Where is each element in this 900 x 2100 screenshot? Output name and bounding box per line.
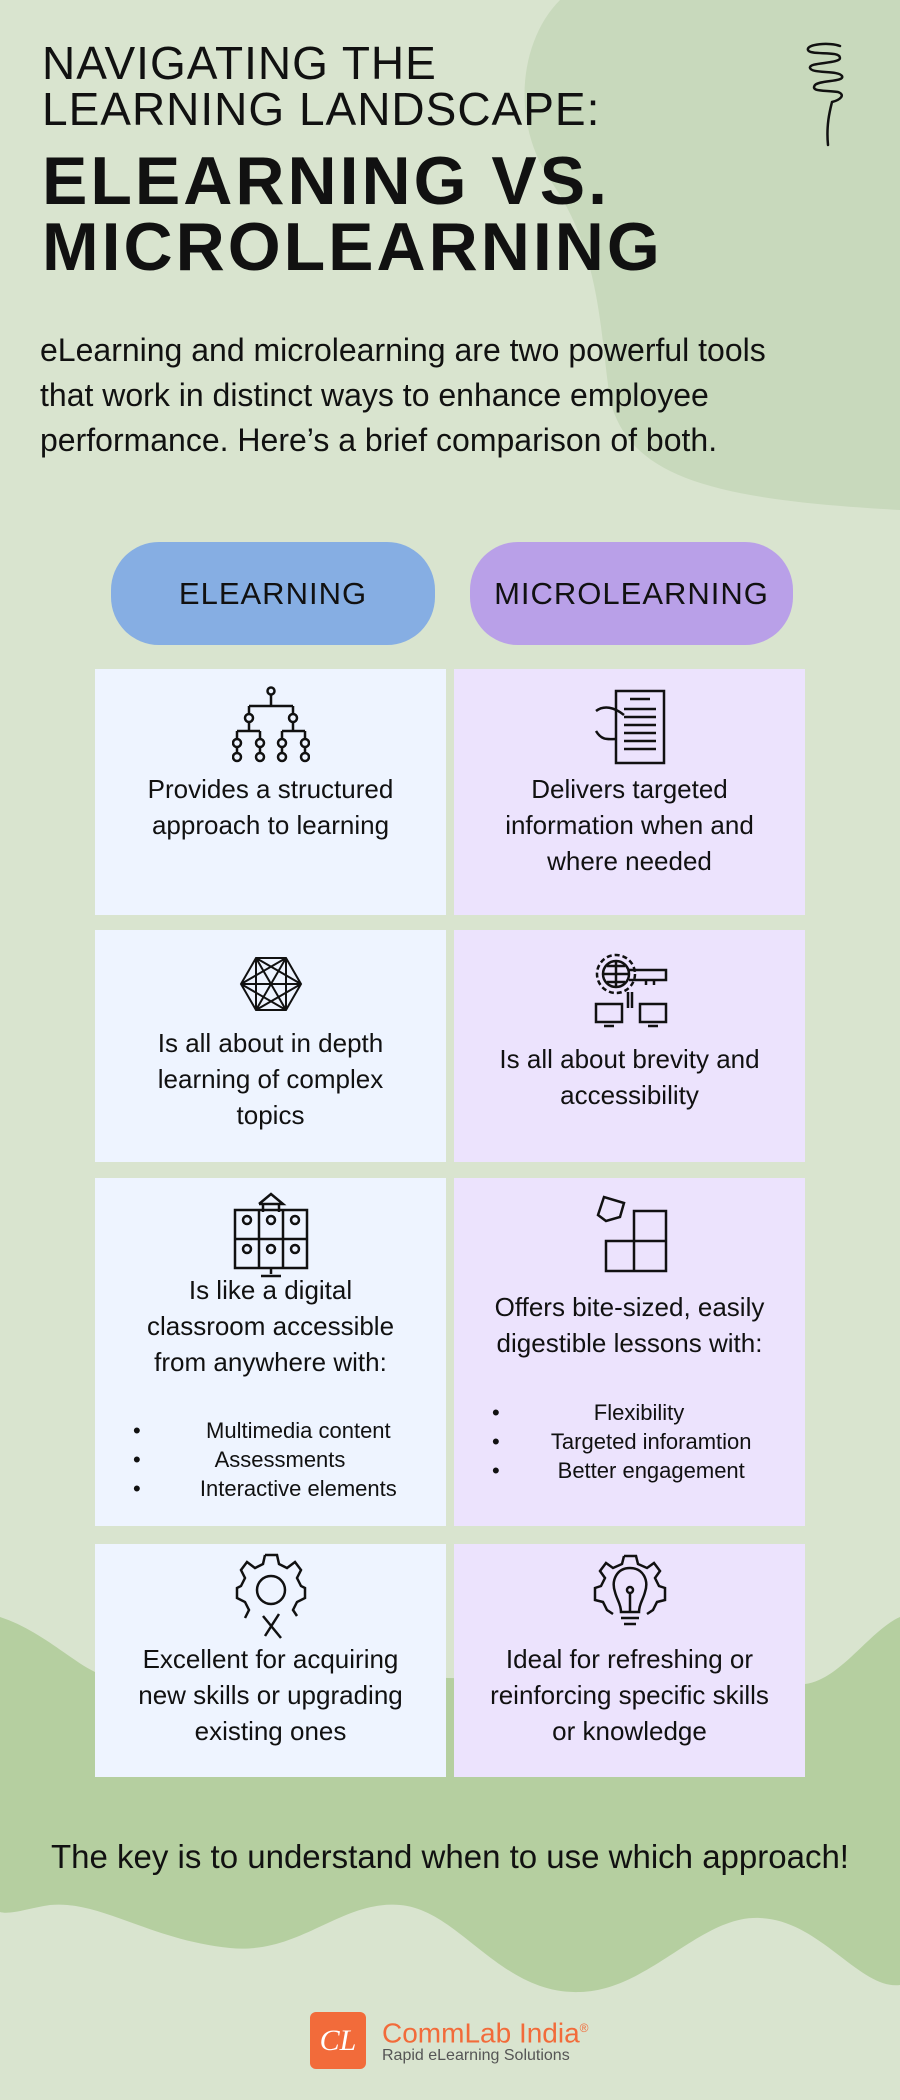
text: in depth: learning of complex [158, 1064, 383, 1094]
card: brevity [454, 930, 805, 1162]
text: in depth: Is all about in depth [158, 1028, 383, 1058]
card: micro targeted [454, 669, 805, 915]
bullet list: elearning: Interactive elements [200, 1476, 397, 1501]
bullet list: microlearning: Better engagement [558, 1458, 745, 1483]
icon: CL logo [310, 2012, 366, 2069]
text: digital classroom [147, 1275, 394, 1377]
icon: CL logo: CL [320, 2024, 356, 2057]
title: NAVIGATING THE [42, 37, 437, 89]
text: targeted: information when and [505, 810, 754, 840]
text: targeted: Delivers targeted [531, 774, 728, 804]
text: bite-sized: digestible lessons with: [497, 1328, 762, 1358]
text: new skills: Excellent for acquiring [143, 1644, 398, 1674]
text: new skills: existing ones [195, 1716, 346, 1746]
icon: gear with tools [236, 1554, 306, 1639]
text: in depth [158, 1028, 383, 1130]
icon: hierarchy [232, 686, 310, 762]
text: structured: approach to learning [152, 810, 389, 840]
title: ELEARNING VS. [42, 143, 610, 219]
logo: CommLab India [310, 2012, 588, 2069]
icon: network [240, 957, 302, 1011]
text: refreshing: or knowledge [552, 1716, 707, 1746]
text: structured: Provides a structured [148, 774, 393, 804]
icon: globe key [594, 954, 668, 1028]
card: elearning structured [95, 669, 446, 915]
text: new skills [138, 1644, 403, 1746]
text: digital classroom: classroom accessible [147, 1311, 394, 1341]
icon: puzzle [596, 1196, 668, 1272]
text: refreshing: Ideal for refreshing or [506, 1644, 753, 1674]
card: bite-sized [454, 1178, 805, 1526]
text: bite-sized [495, 1292, 764, 1358]
text: refreshing [490, 1644, 769, 1746]
intro paragraph: eLearning and microlearning are two powerful tools [40, 332, 766, 368]
intro paragraph: performance. Here’s a brief comparison of both. [40, 422, 717, 458]
bullet list: microlearning [492, 1400, 752, 1483]
text: new skills: new skills or upgrading [138, 1680, 403, 1710]
icon: gear lightbulb [594, 1554, 666, 1626]
pill: microlearning: MICROLEARNING [494, 576, 769, 611]
bullet list: microlearning: Flexibility [594, 1400, 684, 1425]
card: new skills [95, 1544, 446, 1777]
pill: microlearning [470, 542, 793, 645]
intro paragraph [40, 332, 766, 458]
card: digital classroom [95, 1178, 446, 1526]
text: refreshing: reinforcing specific skills [490, 1680, 769, 1710]
footer message: The key is to understand when to use which approach! [51, 1838, 849, 1875]
text: structured [148, 774, 393, 840]
text: digital classroom: from anywhere with: [154, 1347, 387, 1377]
text: targeted: where needed [547, 846, 712, 876]
text: bite-sized: Offers bite-sized, easily [495, 1292, 764, 1322]
card: in depth [95, 930, 446, 1162]
logo: CommLab India: Rapid eLearning Solutions [382, 2047, 570, 2064]
title: LEARNING LANDSCAPE: [42, 83, 600, 135]
title [42, 37, 663, 285]
icon: classroom screen [234, 1192, 308, 1278]
text: in depth: topics [237, 1100, 304, 1130]
text: digital classroom: Is like a digital [189, 1275, 352, 1305]
icon: squiggle [806, 42, 844, 146]
bullet list: microlearning: Targeted inforamtion [551, 1429, 752, 1454]
bullet list: elearning: Assessments [215, 1447, 345, 1472]
icon: document in hand [595, 690, 666, 764]
text: targeted [505, 774, 754, 876]
intro paragraph: that work in distinct ways to enhance employee [40, 377, 709, 413]
text: brevity: accessibility [560, 1080, 699, 1110]
title: MICROLEARNING [42, 209, 663, 285]
logo text: CommLab India® [382, 2017, 588, 2048]
pill: eLearning: ELEARNING [179, 576, 367, 611]
pill: eLearning [111, 542, 435, 645]
bullet list: elearning [134, 1418, 397, 1501]
text: brevity: Is all about brevity and [499, 1044, 760, 1074]
card: refreshing [454, 1544, 805, 1777]
bullet list: elearning: Multimedia content [206, 1418, 391, 1443]
text: brevity [499, 1044, 760, 1110]
